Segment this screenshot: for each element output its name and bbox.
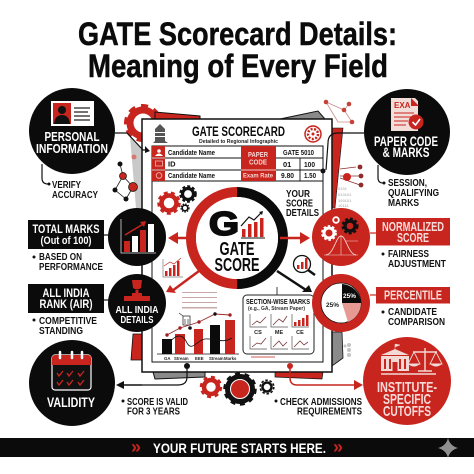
bar and line chart [157,292,239,361]
panel: personal information: PERSONAL [44,129,100,144]
note: competitive standing [32,315,97,337]
your score details text [286,189,319,219]
note: verify accuracy [42,164,98,201]
note: verify accuracy: ACCURACY [52,189,98,201]
label: all india rank [28,284,110,313]
scorecard document [142,119,332,372]
red gear behind the scorecard [126,106,160,140]
footer banner [0,437,474,458]
note: candidate comparison: COMPARISON [388,316,445,328]
score table: ID [168,160,176,168]
score table [152,146,323,181]
bar and line chart: Stream [174,356,189,361]
your score details text: SCORE [286,198,313,210]
background decoration: red wedges and network nodes: 0101 [338,186,348,191]
bottom gears [201,374,274,404]
magnifier chart icon [294,256,315,275]
panel: institute-specific cutoffs [363,337,451,425]
background decoration: red wedges and network nodes: 100101 [338,198,352,203]
score table: 1.50 [304,171,316,180]
panel: validity: VALIDITY [47,394,95,410]
gate score emblem [191,192,283,284]
panel: personal information [29,88,115,174]
panel: paper code and marks: PAPER CODE [374,134,438,149]
emblem [153,124,168,143]
label: all india rank: ALL INDIA [42,286,90,300]
note: session, qualifying marks [378,165,439,209]
note: check admissions: CHECK ADMISSIONS [280,396,362,408]
label: percentile [370,287,450,304]
icon: all india details circle: ALL INDIA [116,304,159,316]
bar and line chart: Stream [209,356,224,361]
section-wise marks panel: ME [275,330,283,336]
score table: Candidate Name [168,148,215,157]
your score details text: DETAILS [286,208,319,219]
connector from scorecard to validity [142,363,190,385]
gate score emblem: GATE [220,238,254,259]
label: total marks: (Out of 100) [40,235,92,247]
bar and line chart: Marks [224,356,237,361]
note: competitive standing: COMPETITIVE [39,315,97,327]
label: percentile: PERCENTILE [384,288,442,302]
icon: normalized score circle [312,208,370,266]
note: fairness adjustment: ADJUSTMENT [388,258,446,270]
note: based on performance: BASED ON [39,251,82,263]
seal [305,126,321,142]
note: verify accuracy: VERIFY [52,179,81,191]
panel: paper code and marks [364,89,450,175]
label: normalized score [370,218,450,246]
label: total marks: TOTAL MARKS [32,222,100,236]
scorecard back sheets [153,111,325,379]
note: score is valid [122,396,188,418]
icon: percentile donut [312,274,370,332]
panel: paper code and marks: EXA [394,101,411,110]
cart icon [179,313,190,325]
footer banner: » [131,437,141,457]
note: score is valid: SCORE IS VALID [127,396,188,408]
connector to paper code [320,133,364,174]
title: Meaning of Every Field [88,48,388,84]
your score details text: YOUR [286,189,311,200]
panel: institute-specific cutoffs: SPECIFIC [383,391,431,408]
scorecard heading: Detailed to Regional Infographic [199,139,278,145]
gate score emblem: SCORE [214,254,260,275]
mini data table [182,292,217,308]
icon: total marks circle [108,208,166,266]
score table: 9.80 [281,171,294,180]
note: candidate comparison: CANDIDATE [388,306,437,318]
section-wise marks panel: SECTION-WISE MARKS [246,297,310,306]
note: score is valid: FOR 3 YEARS [127,406,180,418]
label: normalized score: NORMALIZED [382,219,444,234]
title: GATE Scorecard Details: [78,16,397,52]
label: total marks [28,220,110,249]
icon: percentile donut: 25% [326,302,339,309]
footer banner: » [333,437,343,457]
background decoration: red wedges and network nodes [112,100,363,366]
note: fairness adjustment: FAIRNESS [388,248,429,260]
gears near gate score [158,186,196,214]
icon: all india details circle: DETAILS [120,314,154,326]
score table: PAPER [248,150,268,159]
icon: percentile donut: 25% [343,293,356,300]
arrows from gate score [166,232,312,293]
score table: Exam Rate [243,172,273,180]
note: based on performance: PERFORMANCE [39,261,103,273]
section-wise marks panel [243,287,314,357]
section-wise marks panel: CE [296,330,304,336]
gate score emblem: G [209,205,239,242]
score table: 100 [304,160,315,169]
panel: personal information: INFORMATION [36,141,108,156]
note: fairness adjustment [382,248,446,270]
footer banner: YOUR FUTURE STARTS HERE. [153,441,326,456]
scorecard heading: GATE SCORECARD [192,124,285,139]
section-wise marks panel: CS [254,330,262,336]
note: based on performance [32,251,103,273]
scorecard heading [192,124,285,145]
score table: 01 [283,160,291,169]
background decoration: red wedges and network nodes: 010101 [338,192,352,197]
score table: Candidate Name [168,171,215,180]
connector to institute cutoffs [287,363,363,390]
score table: CODE [249,158,267,166]
section-wise marks panel: (e.g., GA, Stream Paper) [248,306,305,312]
panel: institute-specific cutoffs: INSTITUTE- [377,379,437,396]
label: all india rank: RANK (AIR) [40,297,93,311]
bar and line chart: GA [164,356,170,361]
bar and line chart: EEE [195,356,204,361]
connector from personal information [115,133,150,153]
note: session, qualifying marks: MARKS [388,197,419,209]
label: normalized score: SCORE [397,230,429,245]
background decoration: red wedges and network nodes: 10111 [338,203,349,208]
icon: all india details circle [108,274,166,332]
note: competitive standing: STANDING [39,325,83,337]
note: session, qualifying marks: QUALIFYING [388,187,439,199]
note: check admissions [274,396,362,418]
title [78,16,397,84]
score table: GATE 5010 [283,148,314,157]
panel: paper code and marks: & MARKS [382,145,430,160]
note: candidate comparison [382,306,445,328]
small line chart icon [163,258,183,277]
panel: institute-specific cutoffs: CUTOFFS [383,403,431,420]
panel: validity [29,340,115,426]
note: session, qualifying marks: SESSION, [388,177,427,189]
arrow to validity [116,381,142,389]
note: check admissions: REQUIREMENTS [297,406,362,418]
